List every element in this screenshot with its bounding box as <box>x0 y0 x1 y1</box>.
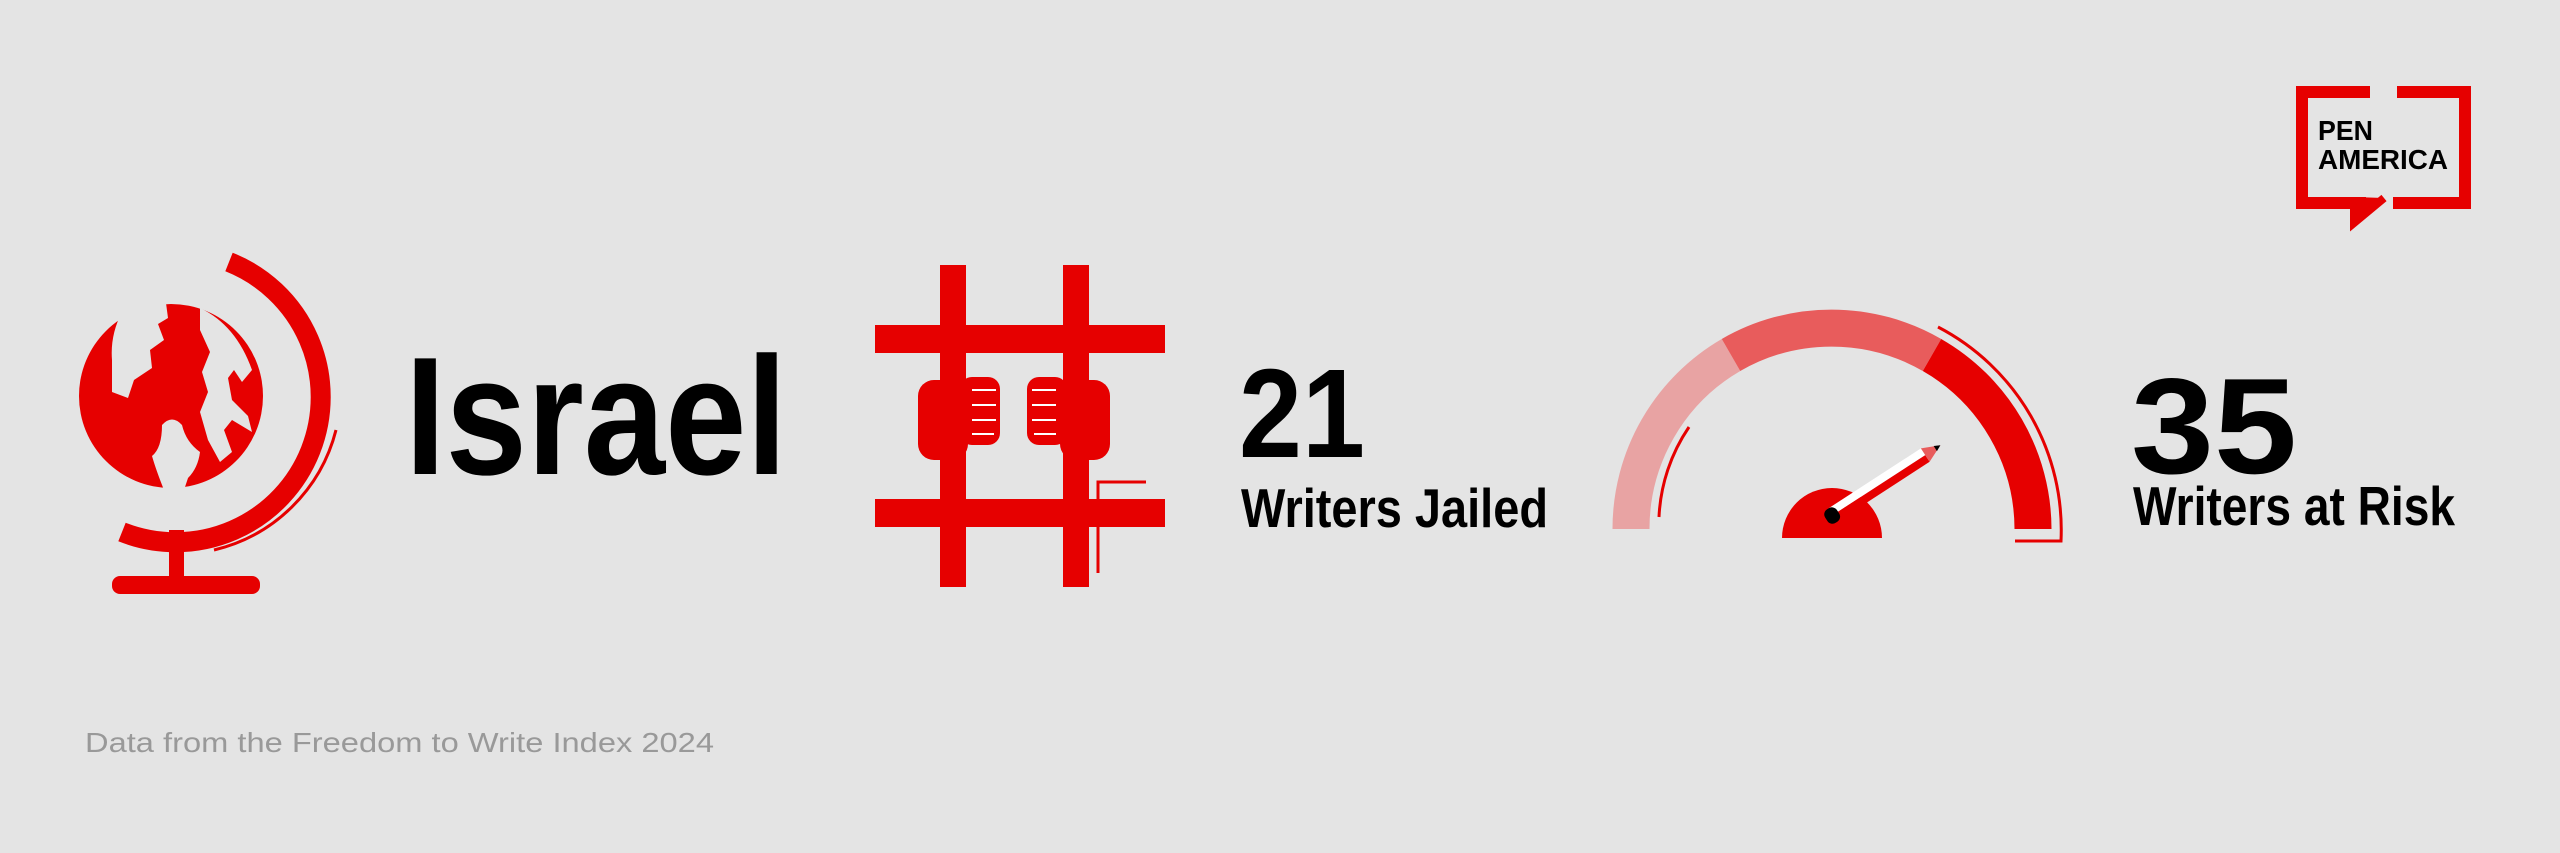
logo: PEN America: PEN <box>2318 115 2373 146</box>
stat: writers at risk: 35 <box>2131 350 2297 502</box>
needle <box>1782 488 1882 538</box>
gauge <box>1631 327 2061 541</box>
fist left <box>918 377 1000 460</box>
logo: PEN America <box>2302 92 2465 223</box>
stat: writers jailed <box>1239 343 1548 539</box>
stat: writers at risk <box>2131 350 2455 537</box>
stat: writers jailed: 21 <box>1239 343 1365 484</box>
footer source: Data from the Freedom to Write Index 2024 <box>85 727 714 758</box>
icon: jail bars with fists <box>875 265 1165 587</box>
fist right <box>1027 377 1110 460</box>
stat: writers at risk: Writers at Risk <box>2133 475 2455 537</box>
country name: Israel <box>405 322 787 510</box>
globe arc <box>122 262 321 542</box>
logo: PEN America: AMERICA <box>2318 144 2448 175</box>
stat: writers jailed: Writers Jailed <box>1241 477 1548 539</box>
stand <box>169 530 184 580</box>
icon: globe <box>79 262 336 594</box>
thin arc <box>214 430 336 550</box>
